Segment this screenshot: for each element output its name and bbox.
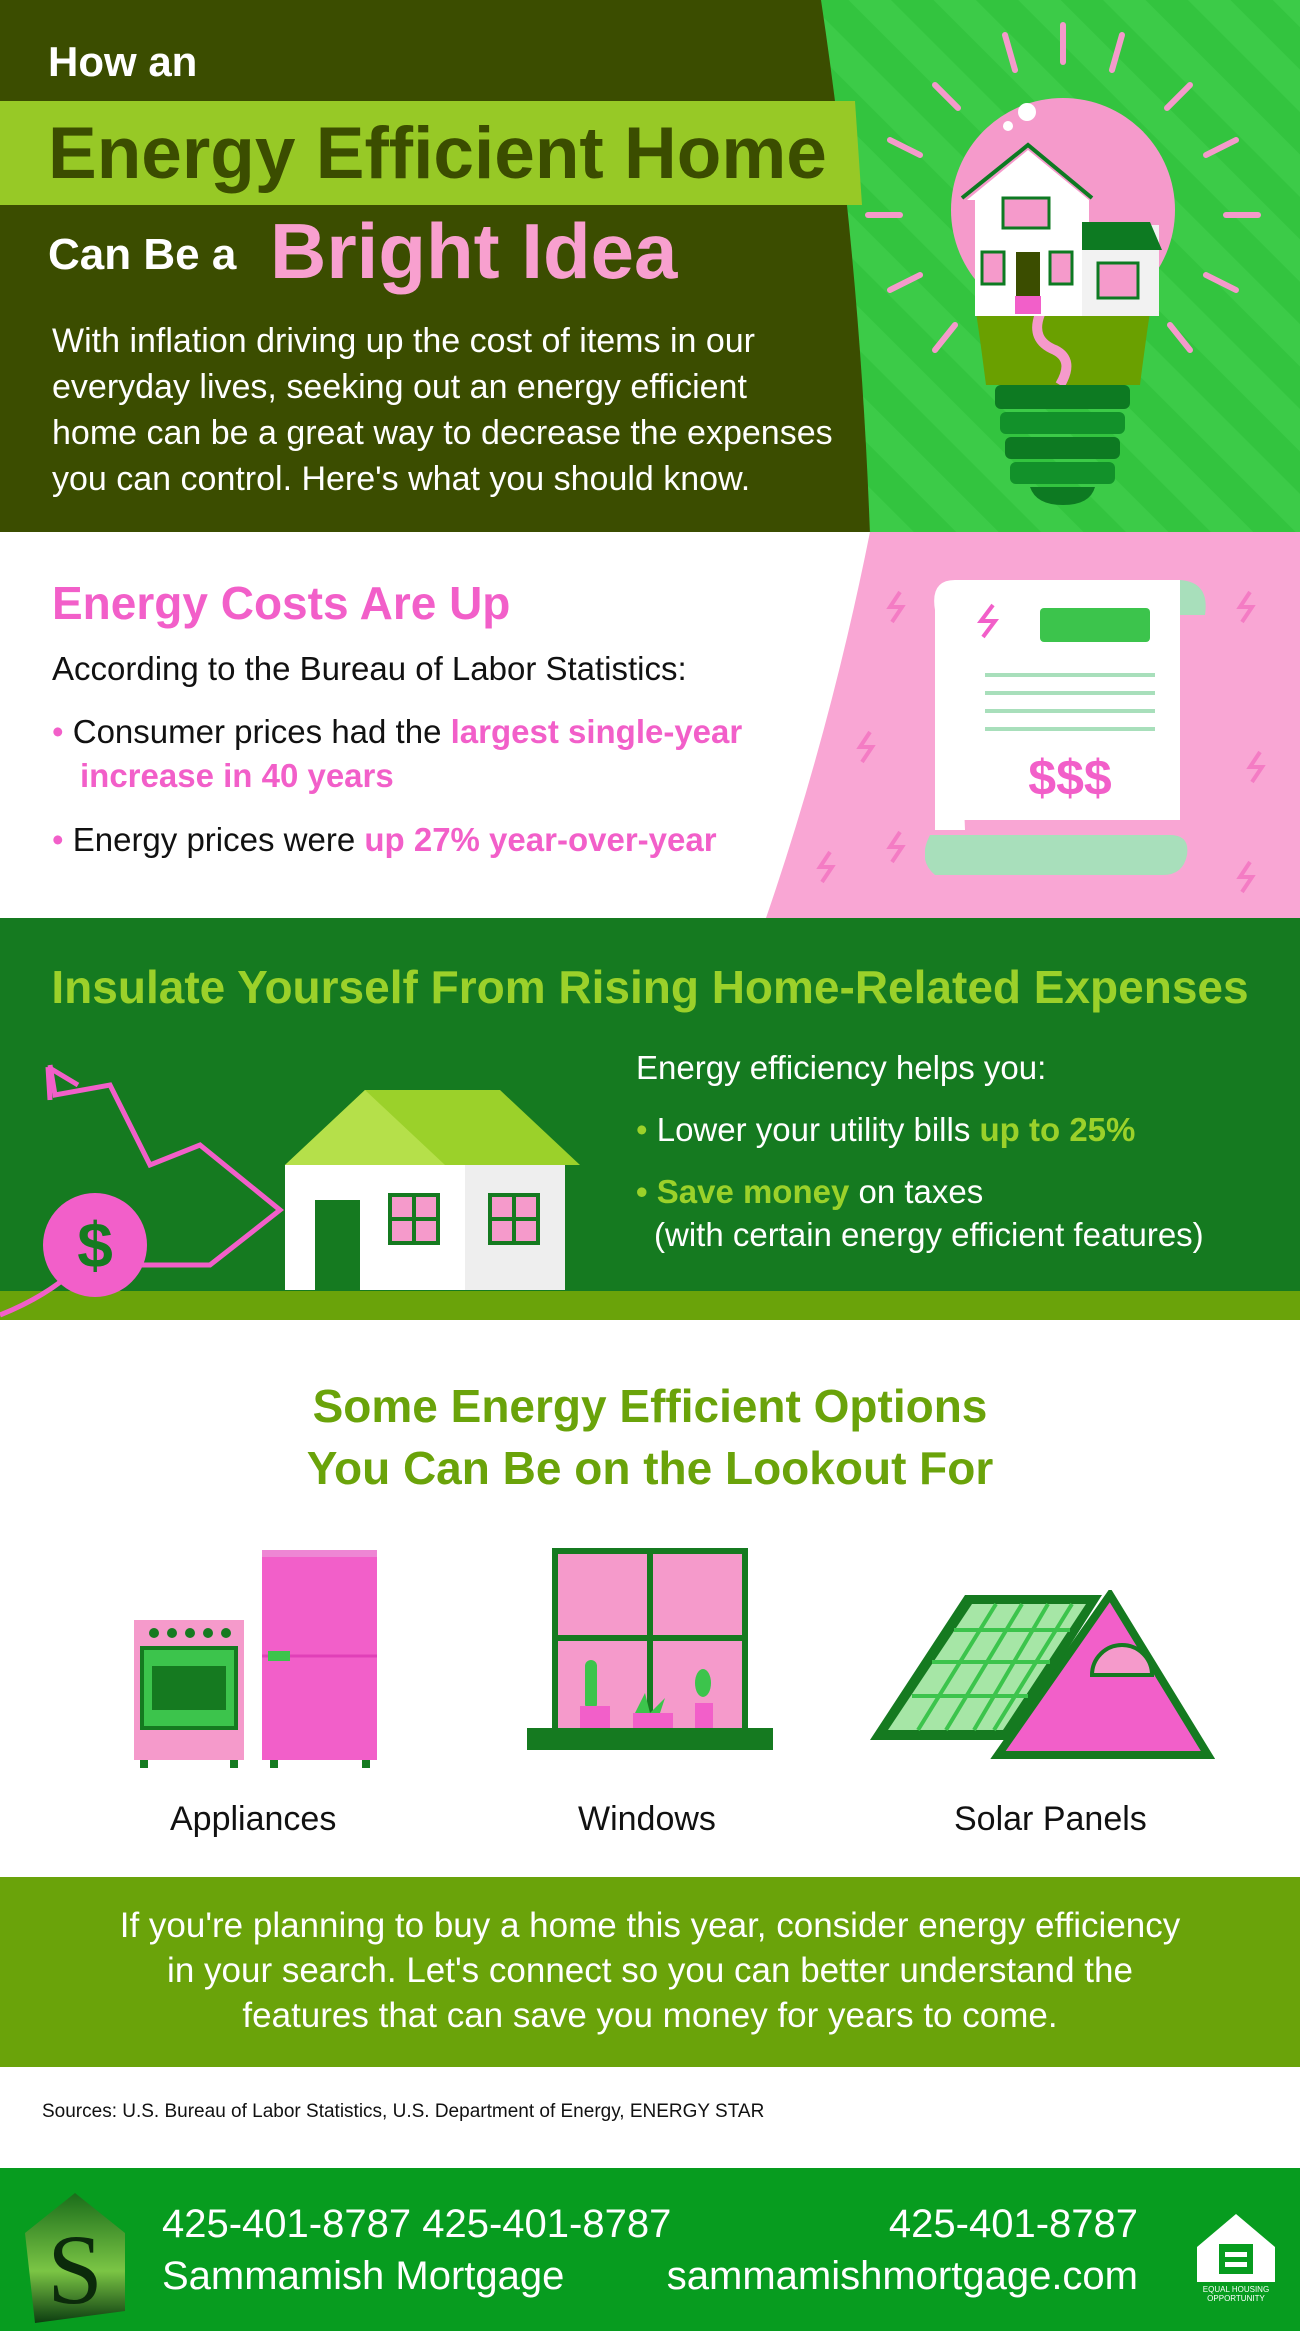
- title: How an: [48, 38, 197, 85]
- intro text: [52, 322, 833, 498]
- text block: efficiency benefits: • Lower your utility bills up to 25%: [636, 1111, 1135, 1148]
- text block: efficiency benefits: Energy efficiency helps you:: [636, 1049, 1046, 1086]
- footer: [0, 2168, 1300, 2331]
- section 3 background: [0, 918, 1300, 1320]
- labels: options: Appliances: [170, 1800, 336, 1838]
- icon: windows: [527, 1548, 773, 1750]
- icon: rising arrow and dollar: [0, 1064, 284, 1318]
- labels: options: Solar Panels: [954, 1800, 1147, 1838]
- text block: BLS stats: increase in 40 years: [80, 757, 394, 794]
- heading: options: [307, 1380, 993, 1494]
- intro text: home can be a great way to decrease the expenses: [52, 414, 833, 452]
- title: [48, 38, 827, 295]
- heading: insulate: Insulate Yourself From Rising Home-Related Expenses: [51, 961, 1249, 1013]
- icon: equal housing: EQUAL HOUSING: [1203, 2285, 1269, 2294]
- sources: Sources: U.S. Bureau of Labor Statistics, U.S. Department of Energy, ENERGY STAR: [42, 2101, 764, 2122]
- icon: company logo: [25, 2193, 125, 2325]
- icon: appliances: [134, 1550, 377, 1768]
- title: Bright Idea: [270, 207, 677, 295]
- intro text: you can control. Here's what you should know.: [52, 460, 750, 498]
- text block: efficiency benefits: (with certain energy efficient features): [654, 1216, 1204, 1253]
- text block: BLS stats: • Consumer prices had the largest single-year: [52, 713, 742, 750]
- icon: rising arrow and dollar: $: [77, 1209, 113, 1281]
- footer: sammamishmortgage.com: [667, 2254, 1138, 2298]
- icon: company logo: S: [47, 2214, 103, 2325]
- text block: BLS stats: [52, 650, 742, 858]
- footer: 425-401-8787 425-401-8787: [162, 2202, 671, 2246]
- icon: equal housing: [1197, 2214, 1275, 2302]
- intro text: With inflation driving up the cost of items in our: [52, 322, 755, 360]
- labels: options: Windows: [578, 1800, 716, 1838]
- callout: call to action: features that can save you money for years to come.: [242, 1996, 1058, 2035]
- intro text: everyday lives, seeking out an energy efficient: [52, 368, 747, 406]
- header background: [0, 0, 1300, 532]
- icon: bill document: [925, 580, 1206, 875]
- title: Can Be a: [48, 230, 236, 279]
- callout: call to action: If you're planning to buy a home this year, consider energy efficiency: [120, 1906, 1180, 1945]
- text block: efficiency benefits: [636, 1049, 1204, 1253]
- callout: call to action: [0, 1877, 1300, 2067]
- callout: call to action: in your search. Let's connect so you can better understand the: [167, 1951, 1133, 1990]
- icon: solar panels: [870, 1590, 1215, 1759]
- icon: house: [285, 1090, 580, 1290]
- heading: options: Some Energy Efficient Options: [313, 1380, 987, 1432]
- heading: energy costs: Energy Costs Are Up: [52, 577, 510, 629]
- footer: Sammamish Mortgage: [162, 2254, 564, 2298]
- heading: options: You Can Be on the Lookout For: [307, 1442, 993, 1494]
- title: Energy Efficient Home: [48, 113, 827, 194]
- text block: BLS stats: According to the Bureau of Labor Statistics:: [52, 650, 687, 687]
- icon: bill document: $$$: [1028, 750, 1112, 806]
- text block: BLS stats: • Energy prices were up 27% year-over-year: [52, 821, 717, 858]
- footer: 425-401-8787: [889, 2202, 1138, 2246]
- icon: light bulb with house: [865, 22, 1261, 505]
- labels: options: [170, 1800, 1147, 1838]
- section 2 background: [0, 532, 1300, 918]
- text block: efficiency benefits: • Save money on taxes: [636, 1173, 983, 1210]
